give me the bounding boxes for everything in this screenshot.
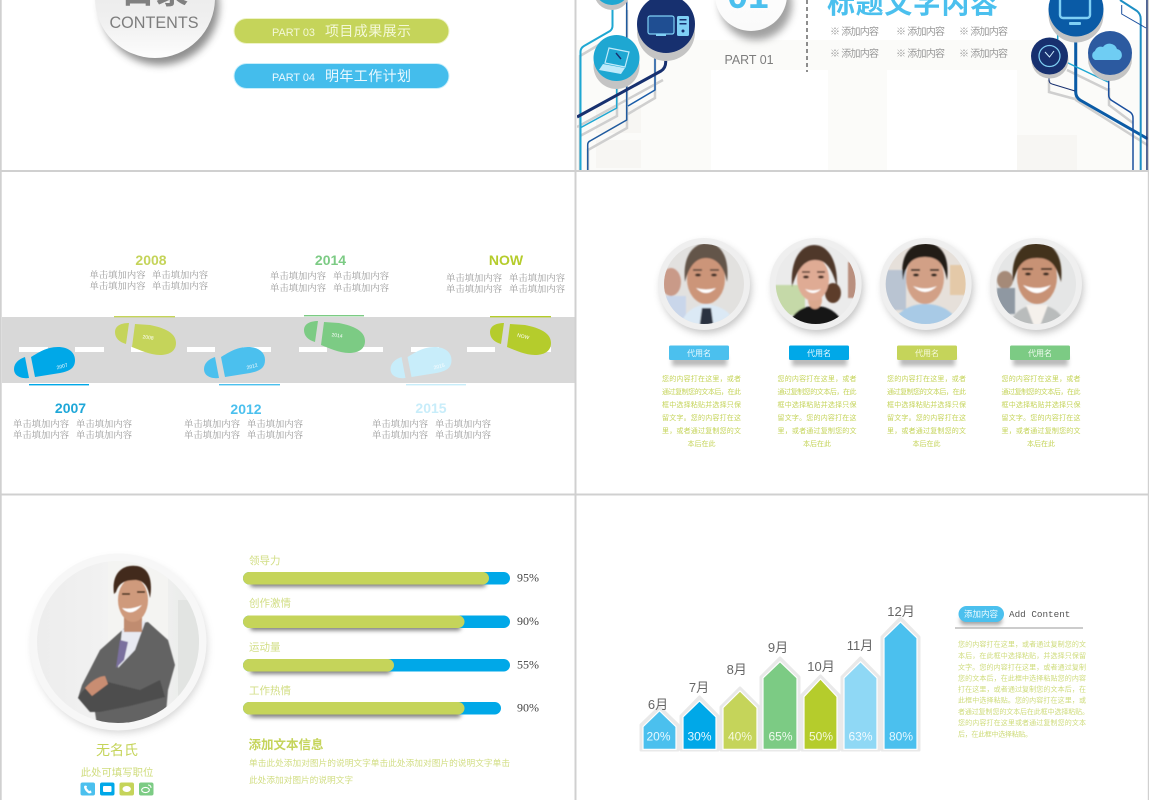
icon: mail: [100, 782, 114, 796]
description text: 您的内容打在这里，或者通过复制您的文: [958, 640, 1086, 648]
name tag 3: [897, 346, 957, 366]
bullet list: ※ 添加内容: [959, 25, 1008, 38]
text: 2014: 单击填加内容: [333, 270, 389, 282]
circle: section number 01: [715, 0, 792, 40]
bio text 3: 框中选择粘贴并选择只保: [887, 400, 966, 409]
faint building background: [596, 105, 1077, 170]
text: 2007: 单击填加内容: [13, 429, 69, 441]
name tag 4: [1010, 346, 1070, 366]
pill: part 04: 明年工作计划: [325, 68, 411, 84]
description text: 后，在此框中选择粘贴。: [958, 730, 1032, 738]
text: 2007: 2007: [55, 400, 86, 416]
text: now: NOW: [489, 252, 524, 268]
text: 2007: 单击填加内容: [13, 418, 69, 430]
panel: monthly chart: [641, 604, 1089, 750]
job title: 此处可填写职位: [81, 766, 153, 779]
skill: 工作热情: [243, 684, 539, 718]
text: 2015: 单击填加内容: [372, 429, 428, 441]
bio text 2: [778, 374, 856, 448]
step: 2012 footprint: [204, 347, 280, 385]
panel: profile: [30, 554, 539, 796]
bio text 4: 里，或者通过复制您的文: [1002, 426, 1080, 435]
bio text 2: 通过复制您的文本后，在此: [778, 387, 856, 396]
bar: 6月 20%: 6月: [648, 697, 668, 712]
bio text 3: [887, 374, 966, 448]
portrait: businessman: [30, 554, 210, 735]
step: 2007 footprint: [14, 347, 89, 385]
name tag 2: 代用名: [807, 348, 831, 358]
text: 2007: 单击填加内容: [76, 429, 132, 441]
step: 2008 footprint: [114, 316, 176, 355]
bullet list: [830, 25, 1008, 60]
bullet list: ※ 添加内容: [959, 47, 1008, 60]
text: 2012: 单击填加内容: [184, 418, 240, 430]
bio text 3: 本后在此: [912, 439, 940, 448]
description text: 您的内容打在这里或者通过复制您的文本: [958, 718, 1086, 727]
bar: 12月 80%: 12月: [887, 604, 915, 619]
name tag 1: [669, 346, 729, 366]
bio text 2: 本后在此: [803, 439, 831, 448]
text: 2015: 单击填加内容: [435, 418, 491, 430]
bio text 1: 留文字。您的内容打在这: [662, 413, 741, 422]
bio text 4: 留文字。您的内容打在这: [1002, 413, 1080, 422]
skill: 创作激情: 90%: [517, 614, 539, 628]
road: [2, 317, 575, 383]
pill: part 03: [234, 18, 450, 44]
text block: add info: 添加文本信息: [248, 737, 324, 752]
bar: 12月 80%: 80%: [889, 730, 913, 744]
text: 2014: 2014: [315, 252, 346, 268]
dashed divider: [806, 0, 808, 72]
text: 2014: 单击填加内容: [270, 270, 326, 282]
icon: phone: [80, 782, 95, 796]
bar: 7月 30%: 30%: [687, 730, 712, 744]
text: 2012: 单击填加内容: [247, 429, 303, 441]
text: 2015: 单击填加内容: [435, 429, 491, 441]
skill: 运动量: 运动量: [249, 642, 281, 654]
bio text 3: 里，或者通过复制您的文: [887, 426, 966, 435]
text: 2012: 单击填加内容: [247, 418, 303, 430]
bar: 9月 65%: 9月: [768, 640, 788, 655]
panel: timeline: [2, 252, 575, 441]
bio text 1: 通过复制您的文本后，在此: [662, 387, 741, 396]
skill: 运动量: [243, 642, 539, 674]
description text: 者通过复制您的文本后在此框中选择粘贴。: [958, 707, 1089, 716]
text: now: 单击填加内容: [446, 283, 502, 295]
bio text 3: 您的内容打在这里，或者: [887, 374, 966, 383]
bio text 2: 留文字。您的内容打在这: [778, 413, 856, 422]
text block: add info: [248, 737, 510, 785]
text: 2014: 单击填加内容: [270, 282, 326, 294]
pill: part 03: PART 03: [272, 27, 315, 39]
portrait: smiling man: [990, 238, 1083, 333]
pill: part 04: [234, 63, 450, 89]
text: 2014: [270, 252, 389, 294]
step: 2015 footprint: 2015: [433, 363, 446, 371]
portrait: older man: [658, 238, 751, 333]
description text: 此框中选择粘贴。您的内容打在这里，或: [958, 696, 1086, 704]
bio text 2: 框中选择粘贴并选择只保: [778, 400, 856, 409]
icon: top teal node: [596, 0, 628, 10]
icon: monitor: [1048, 0, 1104, 42]
skill: 工作热情: 90%: [517, 700, 539, 714]
bar: 7月 30%: 7月: [689, 680, 709, 695]
text: now: [446, 252, 565, 295]
bar: 11月 63%: 11月: [847, 638, 873, 653]
text: 2012: 2012: [230, 401, 262, 417]
bar: 12月 80%: [884, 604, 917, 749]
step: now footprint: NOW: [516, 333, 530, 341]
step: 2014 footprint: 2014: [331, 332, 343, 340]
contents disc: CONTENTS: [110, 14, 198, 32]
bar: 8月 40%: 8月: [727, 662, 747, 677]
bio text 4: 本后在此: [1027, 439, 1055, 448]
legend heading: [955, 606, 1083, 628]
step: 2014 footprint: [304, 315, 365, 353]
bar: 10月 50%: 50%: [809, 730, 833, 744]
text: 2012: [184, 401, 303, 441]
circuit lines: [577, 0, 1148, 170]
bio text 1: 框中选择粘贴并选择只保: [662, 400, 741, 409]
bar: 10月 50%: [804, 659, 837, 749]
name: 无名氏: [96, 742, 138, 758]
bar: 8月 40%: [723, 662, 757, 749]
bullet list: ※ 添加内容: [896, 25, 945, 38]
text: 2007: [13, 400, 132, 441]
description text: 文字。您的内容打在这里，或者通过复制: [958, 662, 1086, 672]
icon: desktop computer: [637, 0, 695, 61]
bio text 2: 里，或者通过复制您的文: [778, 426, 856, 435]
description text: 您的文本后，在此框中选择粘贴您的内容: [958, 674, 1086, 682]
bullet list: ※ 添加内容: [830, 47, 879, 60]
bio text 4: [1002, 374, 1080, 448]
road dashes: [19, 347, 551, 352]
label: part 01: PART 01: [724, 52, 774, 67]
bar shadows: [641, 618, 919, 750]
bio text 1: [662, 374, 741, 448]
name tag 4: 代用名: [1028, 348, 1052, 358]
bar: 11月 63%: [844, 638, 877, 749]
text: 2014: 单击填加内容: [333, 282, 389, 294]
circuit line shadows: [577, 10, 1149, 170]
bar: 10月 50%: 10月: [807, 659, 835, 674]
text block: add info: 单击此处添加对图片的说明文字单击此处添加对图片的说明文字单击: [249, 757, 510, 768]
bar: 6月 20%: [643, 697, 676, 749]
bio text 2: 您的内容打在这里，或者: [778, 374, 856, 383]
step: now footprint: [490, 316, 551, 355]
icon: weibo: [139, 782, 154, 796]
skill: 工作热情: 工作热情: [249, 684, 291, 697]
skill: 领导力: 95%: [517, 570, 539, 584]
text: 2008: 单击填加内容: [90, 280, 146, 292]
text: now: 单击填加内容: [446, 272, 502, 284]
name tag 3: 代用名: [915, 348, 939, 358]
bio text 4: 您的内容打在这里，或者: [1002, 374, 1080, 383]
panel: team: [658, 238, 1083, 448]
text: 2015: 单击填加内容: [372, 418, 428, 430]
text: 2015: 2015: [415, 400, 447, 416]
skill: 领导力: [243, 554, 539, 587]
panel: contents: [95, 0, 450, 89]
skill: 领导力: 领导力: [249, 554, 280, 567]
bio text 1: 里，或者通过复制您的文: [662, 426, 741, 435]
icon: laptop: [594, 35, 640, 89]
panel: section 01 cover: [577, 0, 1149, 170]
icon: chat: [120, 782, 134, 796]
name tag 1: 代用名: [687, 348, 711, 358]
step: 2012 footprint: 2012: [246, 363, 259, 371]
name tag 2: [789, 346, 849, 366]
bar: 11月 63%: 63%: [848, 730, 873, 744]
skill: 运动量: 55%: [517, 658, 539, 672]
text: now: 单击填加内容: [509, 283, 565, 295]
bar: 6月 20%: 20%: [646, 730, 671, 744]
step: 2007 footprint: 2007: [56, 363, 69, 371]
text: 2012: 单击填加内容: [184, 429, 240, 441]
bar: 7月 30%: [683, 680, 716, 749]
portrait: man with blue shirt: [880, 238, 973, 333]
bullet list: ※ 添加内容: [830, 25, 879, 38]
bar: 9月 65%: 65%: [768, 730, 793, 744]
skill: 创作激情: 创作激情: [249, 596, 291, 610]
icon: clock: [1031, 38, 1068, 78]
pill: part 04: PART 04: [272, 72, 315, 84]
description text: 打在这里，或者通过复制您的文本后，在: [958, 684, 1086, 694]
text: now: 单击填加内容: [509, 272, 565, 284]
pill: part 03: 项目成果展示: [325, 23, 411, 39]
bullet list: ※ 添加内容: [896, 47, 945, 60]
text: 2008: [90, 252, 208, 292]
text: 2007: 单击填加内容: [76, 418, 132, 430]
bio text 3: 通过复制您的文本后，在此: [887, 387, 966, 396]
bio text 1: 您的内容打在这里，或者: [662, 374, 741, 383]
bio text 1: 本后在此: [688, 439, 716, 448]
legend heading: Add Content: [1009, 609, 1070, 620]
step: 2015 footprint: [390, 347, 466, 385]
text block: add info: 此处添加对图片的说明文字: [249, 774, 353, 785]
description text: [958, 640, 1089, 738]
contents disc: [95, 0, 219, 65]
portrait: woman: [770, 238, 863, 333]
text: 2008: 单击填加内容: [90, 269, 146, 281]
bio text 4: 框中选择粘贴并选择只保: [1002, 400, 1080, 409]
icon: cloud: [1088, 31, 1132, 81]
description text: 本后，在此框中选择粘贴，并选择只保留: [958, 651, 1086, 660]
legend heading: 添加内容: [964, 609, 998, 619]
text: 2008: 2008: [135, 252, 167, 268]
bar: 9月 65%: [763, 640, 797, 749]
text: 2008: 单击填加内容: [152, 280, 208, 292]
skill: 创作激情: [243, 596, 539, 630]
step: 2008 footprint: 2008: [142, 334, 154, 342]
text: 2008: 单击填加内容: [152, 269, 208, 281]
bio text 4: 通过复制您的文本后，在此: [1002, 387, 1080, 396]
bio text 3: 留文字。您的内容打在这: [887, 413, 966, 422]
text: 2015: [372, 400, 491, 441]
bar: 8月 40%: 40%: [728, 730, 752, 744]
